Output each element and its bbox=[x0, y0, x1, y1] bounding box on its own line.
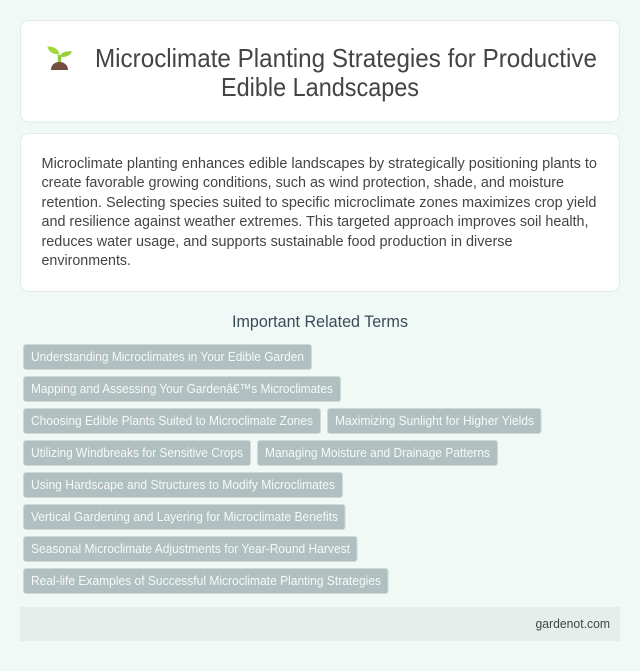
tag: mapping and assessing bbox=[24, 376, 340, 402]
tag: using hardscape: Using Hardscape and Structures to Modify Microclimates bbox=[31, 477, 335, 492]
tag: managing moisture: Managing Moisture and Drainage Patterns bbox=[265, 445, 490, 460]
title: Microclimate Planting Strategies for Productive bbox=[95, 43, 597, 73]
description text: environments. bbox=[42, 252, 131, 269]
tag: mapping and assessing: Mapping and Assessing Your Gardenâ€™s Microclimates bbox=[31, 381, 333, 396]
description text: Microclimate planting enhances edible landscapes by strategically positioning plants to bbox=[42, 155, 597, 172]
tag: understanding microclimates: Understanding Microclimates in Your Edible Garden bbox=[31, 349, 304, 364]
tag: maximizing sunlight bbox=[328, 408, 541, 434]
heading: related terms: Important Related Terms bbox=[232, 313, 408, 331]
description card bbox=[20, 134, 620, 292]
tag: utilizing windbreaks bbox=[24, 440, 250, 466]
tag: choosing edible plants bbox=[24, 408, 320, 434]
tag: real-life examples: Real-life Examples of Successful Microclimate Planting Strategies bbox=[31, 573, 381, 588]
description text: retention. Selecting species suited to specific microclimate zones maximizes crop yield bbox=[42, 194, 596, 211]
footer source text: gardenot.com bbox=[536, 616, 610, 631]
icon: seedling bbox=[48, 46, 72, 70]
footer bbox=[20, 607, 620, 641]
tag: seasonal adjustments bbox=[24, 536, 357, 562]
tag: using hardscape bbox=[24, 472, 342, 498]
description text: reduces water usage, and supports sustainable food production in diverse bbox=[42, 233, 512, 250]
footer bar bbox=[20, 607, 620, 641]
tag: understanding microclimates bbox=[24, 344, 312, 370]
header card bbox=[20, 20, 620, 122]
panel: description bbox=[20, 134, 620, 292]
tag: utilizing windbreaks: Utilizing Windbreaks for Sensitive Crops bbox=[31, 445, 243, 460]
title bbox=[95, 43, 597, 102]
tag: real-life examples bbox=[24, 568, 388, 594]
description text: create favorable growing conditions, such as wind protection, shade, and moisture bbox=[42, 174, 564, 191]
description text: and resilience against weather extremes. This targeted approach improves soil health, bbox=[42, 213, 588, 230]
panel: related term tags bbox=[24, 344, 541, 594]
tag: maximizing sunlight: Maximizing Sunlight for Higher Yields bbox=[335, 413, 534, 428]
title: Edible Landscapes bbox=[221, 72, 419, 102]
tag: managing moisture bbox=[258, 440, 498, 466]
tag: choosing edible plants: Choosing Edible Plants Suited to Microclimate Zones bbox=[31, 413, 313, 428]
tag: vertical gardening: Vertical Gardening and Layering for Microclimate Benefits bbox=[31, 509, 338, 524]
tag: seasonal adjustments: Seasonal Microclimate Adjustments for Year-Round Harvest bbox=[31, 541, 350, 556]
tag: vertical gardening bbox=[24, 504, 345, 530]
description text bbox=[42, 155, 597, 269]
panel: title header bbox=[20, 20, 620, 122]
